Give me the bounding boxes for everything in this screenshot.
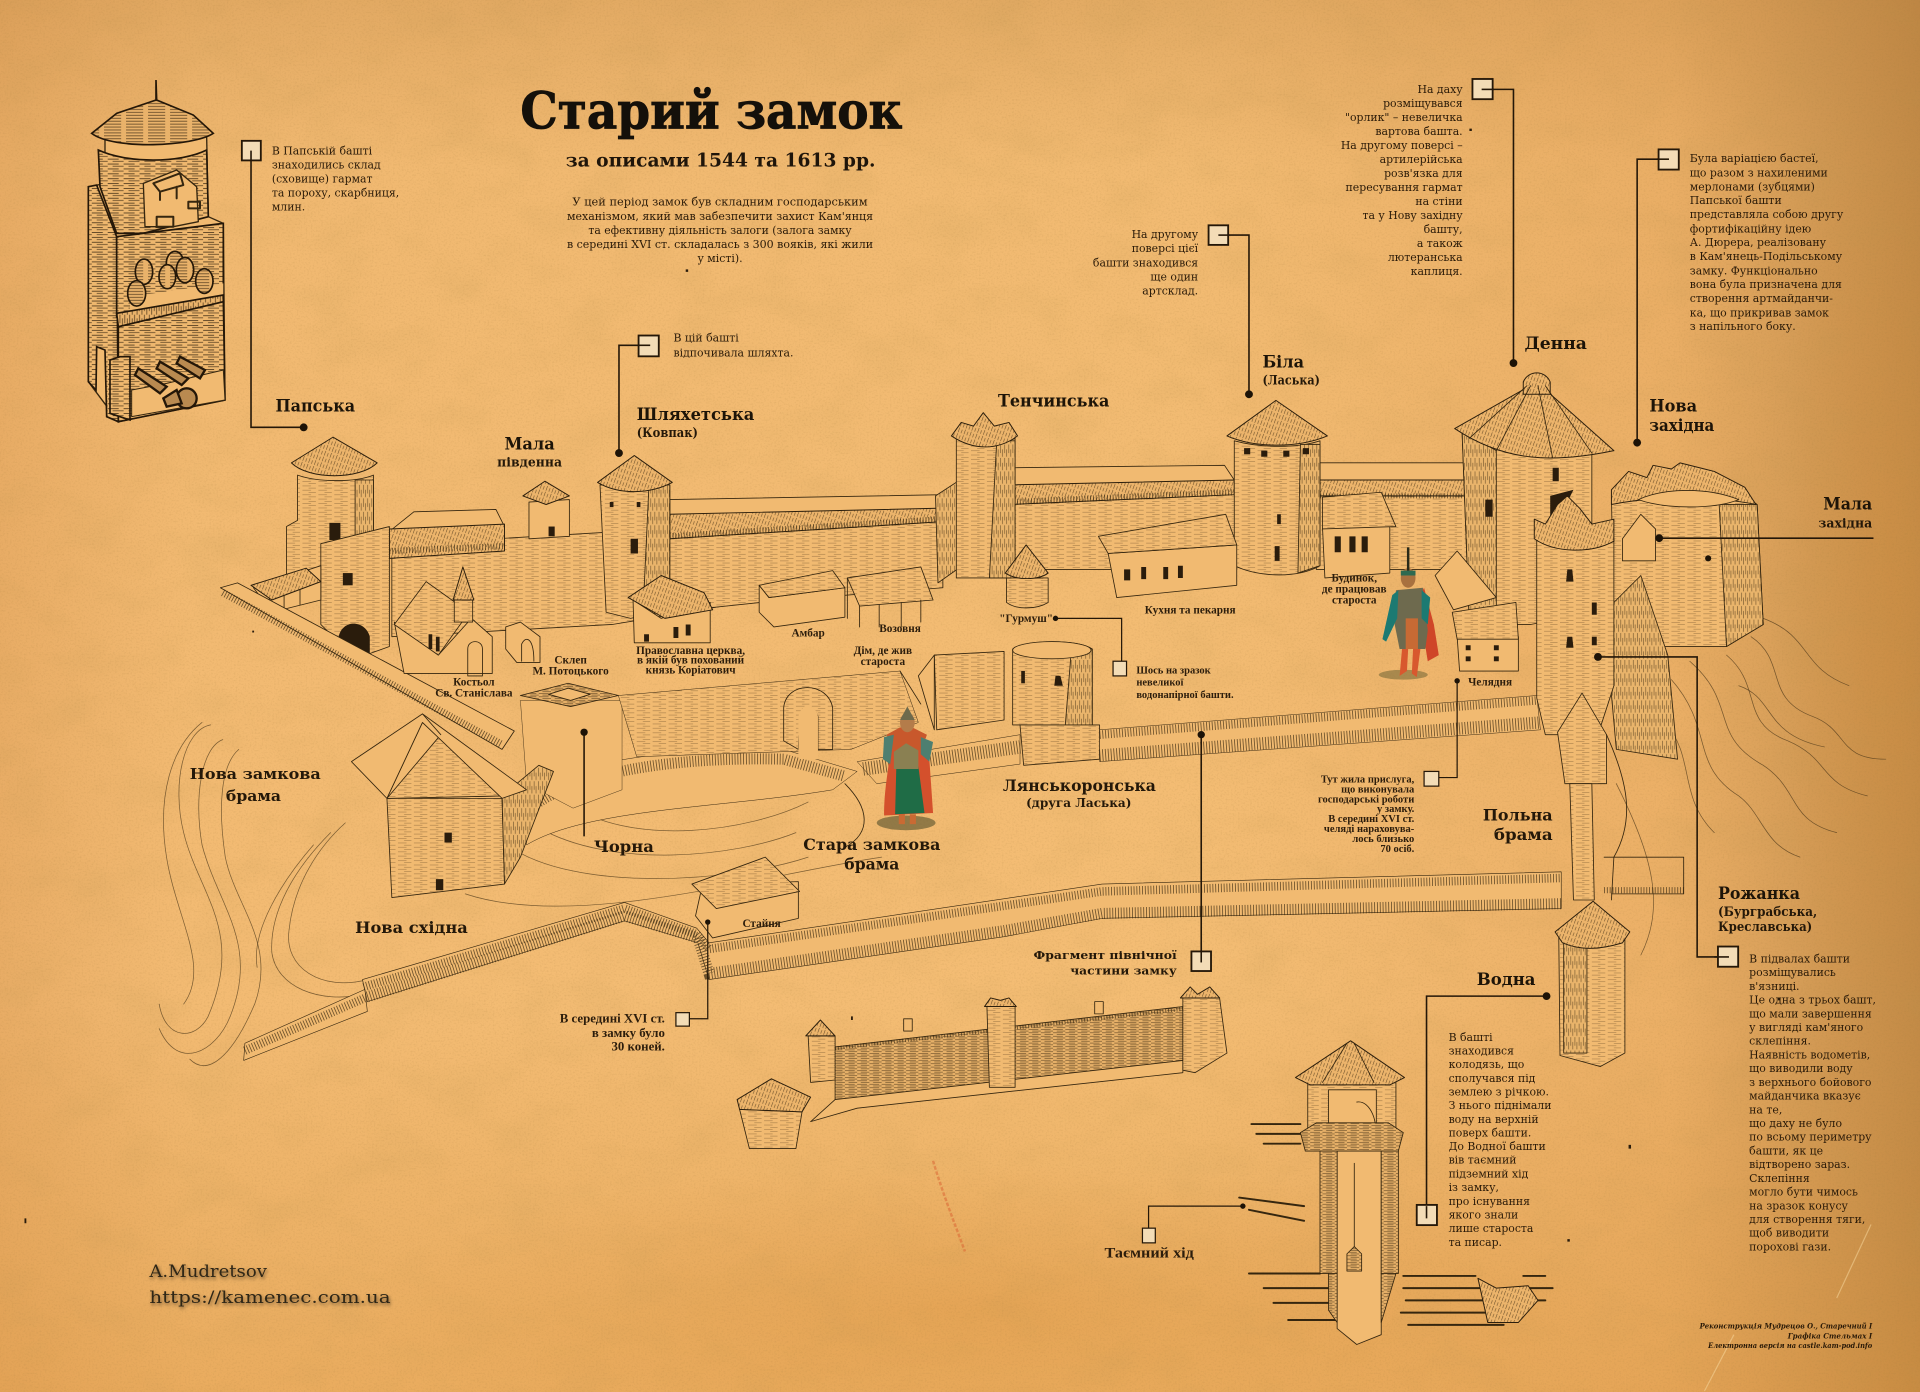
callout: Mala west: західна xyxy=(1818,516,1873,532)
conical roof xyxy=(92,80,213,145)
subtitle: за описами 1544 та 1613 рр. xyxy=(566,151,876,172)
callout: Shliakhetska xyxy=(615,332,793,457)
callout: Vodna: із замку, xyxy=(1449,1181,1499,1194)
callout: Rozhanka: (Бурграбська, xyxy=(1718,904,1817,920)
label: Mala south xyxy=(497,433,562,471)
callout: Nova west: ка, що прикривав замок xyxy=(1690,306,1829,319)
callout: Rozhanka: що даху не було xyxy=(1749,1117,1842,1130)
callout: servants: Тут жила прислуга, xyxy=(1321,774,1415,785)
Kostel of St. Stanislaus xyxy=(394,567,492,676)
fragment of northern castle wall xyxy=(737,987,1227,1149)
callout: Papska: знаходились склад xyxy=(272,158,381,171)
callout: Nova west: в Кам'янець-Подільському xyxy=(1690,250,1843,263)
callout: servants: 70 осіб. xyxy=(1380,844,1415,855)
callout: Papska: (сховище) гармат xyxy=(272,172,373,185)
label: Mala south: південна xyxy=(497,455,562,471)
building beside Bila xyxy=(1322,492,1396,578)
Kitchen and bakery xyxy=(1098,514,1237,598)
callout: Vodna: підземний хід xyxy=(1449,1167,1529,1180)
title: Старий замок xyxy=(520,82,902,141)
callout: Hurmush: Шось на зразок xyxy=(1136,665,1212,676)
barrels xyxy=(128,251,213,306)
callout: Nova west: замку. Функціонально xyxy=(1690,264,1818,277)
label: Lianskoronska: (друга Ласька) xyxy=(1026,796,1131,810)
callout: Denna: та у Нову західну xyxy=(1362,209,1463,222)
credits: Реконструкція Мудрецов О., Старечний І xyxy=(1699,1322,1873,1331)
callout: Rozhanka: Це одна з трьох башт, xyxy=(1749,994,1876,1007)
callout: Hurmush xyxy=(999,613,1234,701)
gate bastion xyxy=(740,1109,802,1149)
callout: stable: 30 коней. xyxy=(611,1040,665,1054)
small building labels: Костьол xyxy=(453,677,495,689)
callout: Nova west: вона була призначена для xyxy=(1690,278,1842,291)
callout: Vodna: поверх башти. xyxy=(1449,1126,1531,1139)
figure: noble in green xyxy=(877,707,936,830)
callout: Denna: На другому поверсі – xyxy=(1341,139,1463,152)
callout: Hurmush: "Гурмуш" xyxy=(999,613,1053,625)
callout: Denna: розміщувався xyxy=(1383,97,1463,110)
label: Old castle gate: Стара замкова xyxy=(803,835,940,854)
callout: Vodna: землею з річкою. xyxy=(1449,1085,1549,1098)
Polna gate tower and road xyxy=(1558,693,1684,900)
callout: Nova west xyxy=(1633,149,1844,447)
callout: Vodna: якого знали xyxy=(1449,1208,1518,1221)
south wall west segment with Chorna tower xyxy=(520,671,921,808)
small building labels: Возовня xyxy=(879,623,921,635)
towers xyxy=(808,1036,835,1082)
south wall east segment xyxy=(857,696,1540,784)
small south tower Mala xyxy=(523,481,569,539)
callout: Nova west: створення артмайданчи- xyxy=(1690,292,1833,305)
label: Bila: (Ласька) xyxy=(1262,372,1320,388)
label: Shliakhetska: (Ковпак) xyxy=(637,425,698,441)
Nova skhidna tower xyxy=(351,714,553,898)
small building labels: Дім, де жив xyxy=(854,645,912,657)
diagonal west wall xyxy=(220,583,514,749)
callout: Rozhanka: що виводили воду xyxy=(1749,1062,1853,1075)
label: New castle gate xyxy=(190,765,321,805)
callout: Vodna: воду на верхній xyxy=(1449,1113,1539,1126)
callout: Bila: ще один xyxy=(1150,270,1198,283)
callout: Rozhanka: Креславська) xyxy=(1718,919,1812,935)
callout: Chorna xyxy=(580,729,654,856)
small building labels: староста xyxy=(861,656,905,668)
callout: secret passage xyxy=(1104,1203,1246,1262)
small building labels: Православна церква, xyxy=(636,645,745,657)
callout: stable xyxy=(560,922,708,1054)
label: Polna gate: брама xyxy=(1494,825,1553,844)
callout: Rozhanka: розміщувались xyxy=(1749,966,1836,979)
small building labels: староста xyxy=(1332,595,1377,607)
label: Old castle gate xyxy=(803,835,940,873)
callout: servants: Челядня xyxy=(1468,677,1512,689)
callout: Denna: розв'язка для xyxy=(1384,167,1463,180)
credits: Графіка Стельмах І xyxy=(1787,1331,1873,1340)
label: Nova west: Нова xyxy=(1649,395,1697,415)
callout: Rozhanka: порохові гази. xyxy=(1749,1240,1831,1253)
Hurmush water tower xyxy=(1005,545,1048,608)
callout: Vodna: колодязь, що xyxy=(1449,1058,1524,1071)
callout: Denna: пересування гармат xyxy=(1346,181,1463,194)
ground and hatches xyxy=(1249,1124,1553,1325)
small building labels xyxy=(435,573,1387,930)
callout: Denna: на стіни xyxy=(1415,195,1463,208)
label: Polna gate: Польна xyxy=(1483,805,1553,824)
callout: Rozhanka: могло бути чимось xyxy=(1749,1186,1858,1199)
label: New castle gate: Нова замкова xyxy=(190,765,321,783)
callout: Denna: артилерійська xyxy=(1380,153,1463,166)
label: Bila: Біла xyxy=(1262,351,1304,371)
callout: Nova west: з напільного боку. xyxy=(1690,320,1796,333)
callout: Bila: На другому xyxy=(1132,228,1199,241)
author signature: https://kamenec.com.ua xyxy=(149,1288,391,1308)
Papska tower on main view xyxy=(287,437,377,588)
label: New east: Нова східна xyxy=(355,918,468,937)
small building labels: Будинок, xyxy=(1331,573,1377,585)
crypt of M. Potocki xyxy=(506,622,540,662)
cannons xyxy=(135,357,205,408)
callout: Rozhanka: відтворено зараз. xyxy=(1749,1158,1850,1171)
room of barrels xyxy=(117,223,223,317)
label: Denna: Денна xyxy=(1524,333,1587,353)
callout: Rozhanka xyxy=(1594,653,1876,1253)
well head xyxy=(1300,1123,1403,1151)
callout: servants: челяді нараховува- xyxy=(1324,824,1415,835)
Denna tower xyxy=(1455,373,1614,624)
author signature xyxy=(148,1262,391,1308)
callout: Rozhanka: на зразок конусу xyxy=(1749,1199,1849,1212)
intro text: У цей період замок був складним господарським xyxy=(572,196,868,209)
tower side wall xyxy=(88,185,118,422)
label: Shliakhetska: Шляхетська xyxy=(637,404,755,424)
callout: Chorna: Чорна xyxy=(594,837,654,856)
intro text: механізмом, який мав забезпечити захист Кам'янця xyxy=(567,210,873,223)
callout: Bila: башти знаходився xyxy=(1093,256,1198,269)
small building labels: Склеп xyxy=(554,655,587,667)
label: Nova west xyxy=(1649,395,1715,435)
callout: Rozhanka: башти, як це xyxy=(1749,1144,1823,1157)
table and chest xyxy=(153,173,200,227)
small building labels: в якій був похований xyxy=(637,655,745,667)
secret passage xyxy=(1239,1198,1304,1221)
callout: Nova west: Була варіацією бастеї, xyxy=(1690,152,1819,165)
Bila tower xyxy=(1227,400,1327,575)
wall face xyxy=(835,1007,1183,1100)
callout: Papska: млин. xyxy=(272,201,305,214)
cutaway of Papska tower xyxy=(88,80,225,422)
callout: Denna: башту, xyxy=(1424,223,1463,236)
Stara gate arch xyxy=(784,688,833,759)
callout: servants: лось близько xyxy=(1352,834,1414,845)
small building labels: де працював xyxy=(1322,584,1387,596)
label: Bila xyxy=(1262,351,1320,388)
callout: Rozhanka: склепіння. xyxy=(1749,1035,1811,1048)
intro text: та ефективну діяльність залоги (залога замку xyxy=(588,224,852,237)
callout: Shliakhetska: відпочивала шляхта. xyxy=(673,346,793,359)
outer lower rampart xyxy=(244,872,1561,1060)
intro text xyxy=(567,196,873,265)
callout: Nova west: А. Дюрера, реалізовану xyxy=(1690,236,1827,249)
callout: servants: що виконувала xyxy=(1341,784,1415,795)
intro text: у місті). xyxy=(697,252,743,265)
callout: Papska: та пороху, скарбниця, xyxy=(272,187,399,200)
back wall: Papska to Mala xyxy=(389,509,759,637)
callout: Shliakhetska: В цій башті xyxy=(673,332,739,345)
small building labels: Св. Станіслава xyxy=(435,688,513,700)
label: Tenchynska: Тенчинська xyxy=(998,391,1110,411)
callout: northern fragment xyxy=(1033,731,1211,978)
callout: Vodna: До Водної башти xyxy=(1449,1140,1546,1153)
callout: secret passage: Таємний хід xyxy=(1104,1246,1194,1262)
label: Shliakhetska xyxy=(637,404,755,441)
label: Mala south: Мала xyxy=(504,433,555,453)
small building labels: князь Коріатович xyxy=(646,664,736,676)
callout: Rozhanka: для створення тяги, xyxy=(1749,1213,1865,1226)
callout: Rozhanka: щоб виводити xyxy=(1749,1227,1829,1240)
callout: Denna: "орлик" – невеличка xyxy=(1345,111,1463,124)
callout: Hurmush: невеликої xyxy=(1136,678,1184,689)
callout: Rozhanka: Рожанка xyxy=(1718,883,1800,903)
water tower section drawing xyxy=(1239,1041,1553,1344)
callout: Vodna: сполучався під xyxy=(1449,1072,1536,1085)
callout: Papska xyxy=(242,141,399,431)
small building labels: Стайня xyxy=(742,918,781,930)
callout: Denna xyxy=(1341,79,1517,367)
callout: Vodna xyxy=(1417,969,1551,1249)
cutaway upper level xyxy=(98,150,208,233)
callout: Nova west: що разом з нахиленими xyxy=(1690,166,1828,179)
conical roof xyxy=(1296,1041,1404,1085)
callout: Vodna: та писар. xyxy=(1449,1236,1502,1249)
author signature: A.Mudretsov xyxy=(148,1262,267,1282)
curtain wall: Bila to Denna xyxy=(1316,463,1467,569)
label: Old castle gate: брама xyxy=(844,854,899,873)
label: Lianskoronska xyxy=(1003,776,1156,810)
small building labels: Амбар xyxy=(792,628,825,640)
callout: servants: В середині XVI ст. xyxy=(1328,814,1415,825)
callout: Mala west: Мала xyxy=(1823,493,1873,513)
terrain contours: right river xyxy=(1616,618,1886,955)
callout: stable: В середині XVI ст. xyxy=(560,1011,665,1025)
credits xyxy=(1699,1322,1873,1350)
label: Papska: Папська xyxy=(276,395,355,415)
callout: Papska: В Папській башті xyxy=(272,144,373,157)
Stajnia stable xyxy=(692,857,800,938)
callout: Rozhanka: у вигляді кам'яного xyxy=(1749,1021,1863,1034)
label: Polna gate xyxy=(1483,805,1553,844)
callout: northern fragment: частини замку xyxy=(1070,965,1177,978)
callout: northern fragment: Фрагмент північної xyxy=(1033,949,1178,962)
intro text: в середині XVI ст. складалась з 300 вояків, які жили xyxy=(567,238,873,251)
label: New castle gate: брама xyxy=(226,787,281,805)
hill bank under south wall xyxy=(527,749,864,847)
credits: Електронна версія на castle.kam-pod.info xyxy=(1707,1341,1872,1350)
Tenchynska tower xyxy=(951,413,1018,578)
small building labels: Кухня та пекарня xyxy=(1145,604,1236,616)
callout: Denna: а також xyxy=(1417,237,1463,250)
Vozovnia coach house xyxy=(847,567,933,627)
callout: Rozhanka: майданчика вказує xyxy=(1749,1090,1861,1103)
callout: Denna: вартова башта. xyxy=(1375,125,1463,138)
callout: Rozhanka: в'язниці. xyxy=(1749,980,1800,993)
callout: Hurmush: водонапірної башти. xyxy=(1136,690,1234,701)
callout: Nova west: представляла собою другу xyxy=(1690,208,1844,221)
cannon room xyxy=(118,300,225,422)
terrain contours: left hill xyxy=(159,722,882,1066)
figure: starost xyxy=(1379,547,1439,680)
callout: Denna: каплиця. xyxy=(1411,265,1463,278)
covered gallery on the diagonal wall xyxy=(251,566,321,612)
Rozhanka tower and ramp xyxy=(1534,496,1678,759)
callout: Bila xyxy=(1093,225,1253,398)
callout: Vodna: Водна xyxy=(1477,969,1536,989)
interior light wedge xyxy=(143,170,198,227)
Shliakhetska tower xyxy=(598,456,672,618)
callout: Nova west: Папської башти xyxy=(1690,194,1782,207)
Nova zakhidna bastion xyxy=(1611,463,1763,647)
callout: Rozhanka: що мали завершення xyxy=(1749,1007,1872,1020)
callout: Nova west: мерлонами (зубцями) xyxy=(1690,180,1815,193)
floor balustrade xyxy=(117,295,223,327)
callout: Bila: артсклад. xyxy=(1142,284,1198,297)
callout: Vodna: лише староста xyxy=(1449,1222,1534,1235)
callout: Rozhanka: Наявність водометів, xyxy=(1749,1048,1870,1061)
callout: Rozhanka: з верхнього бойового xyxy=(1749,1076,1871,1089)
main gate tower xyxy=(321,527,389,659)
callout: Nova west: фортифікаційну ідею xyxy=(1690,222,1811,235)
callout: Vodna: вів таємний xyxy=(1449,1154,1517,1167)
callout: Mala west xyxy=(1655,493,1873,561)
Cheliadnia servants house xyxy=(1435,551,1518,671)
callout: Vodna: З нього піднімали xyxy=(1449,1099,1551,1112)
curtain wall: Tenchynska to Bila xyxy=(1011,465,1237,569)
callout: servants: у замку. xyxy=(1377,804,1415,815)
callout: servants xyxy=(1318,677,1512,855)
callout: Rozhanka: по всьому периметру xyxy=(1749,1131,1872,1144)
callout: Rozhanka: Склепіння xyxy=(1749,1172,1810,1185)
upper tower xyxy=(1308,1078,1396,1129)
callout: Denna: лютеранська xyxy=(1388,251,1463,264)
bell weight xyxy=(1347,1247,1362,1271)
label: Nova west: західна xyxy=(1649,415,1715,435)
curtain wall: Shliakhetska to Tenchynska xyxy=(667,475,983,612)
Orthodox church xyxy=(628,576,713,643)
callout: servants: господарські роботи xyxy=(1318,794,1414,805)
callout: Vodna: про існування xyxy=(1449,1195,1530,1208)
callout: Vodna: В башті xyxy=(1449,1031,1493,1044)
shaft xyxy=(1337,1151,1381,1344)
starost's house wall xyxy=(918,651,1004,730)
callout: Bila: поверсі цієї xyxy=(1132,242,1199,255)
Vodna tower xyxy=(1555,901,1630,1067)
Lianskoronska tower xyxy=(1013,642,1100,765)
small building labels: М. Потоцького xyxy=(532,666,609,678)
callout: Rozhanka: В підвалах башти xyxy=(1749,952,1850,965)
label: Lianskoronska: Лянськоронська xyxy=(1003,776,1156,795)
callout: Denna: На даху xyxy=(1418,83,1463,96)
Ambar barn xyxy=(759,571,845,627)
callout: Vodna: знаходився xyxy=(1449,1045,1514,1058)
callout: stable: в замку було xyxy=(592,1026,665,1040)
callout: Rozhanka: на те, xyxy=(1749,1103,1782,1116)
